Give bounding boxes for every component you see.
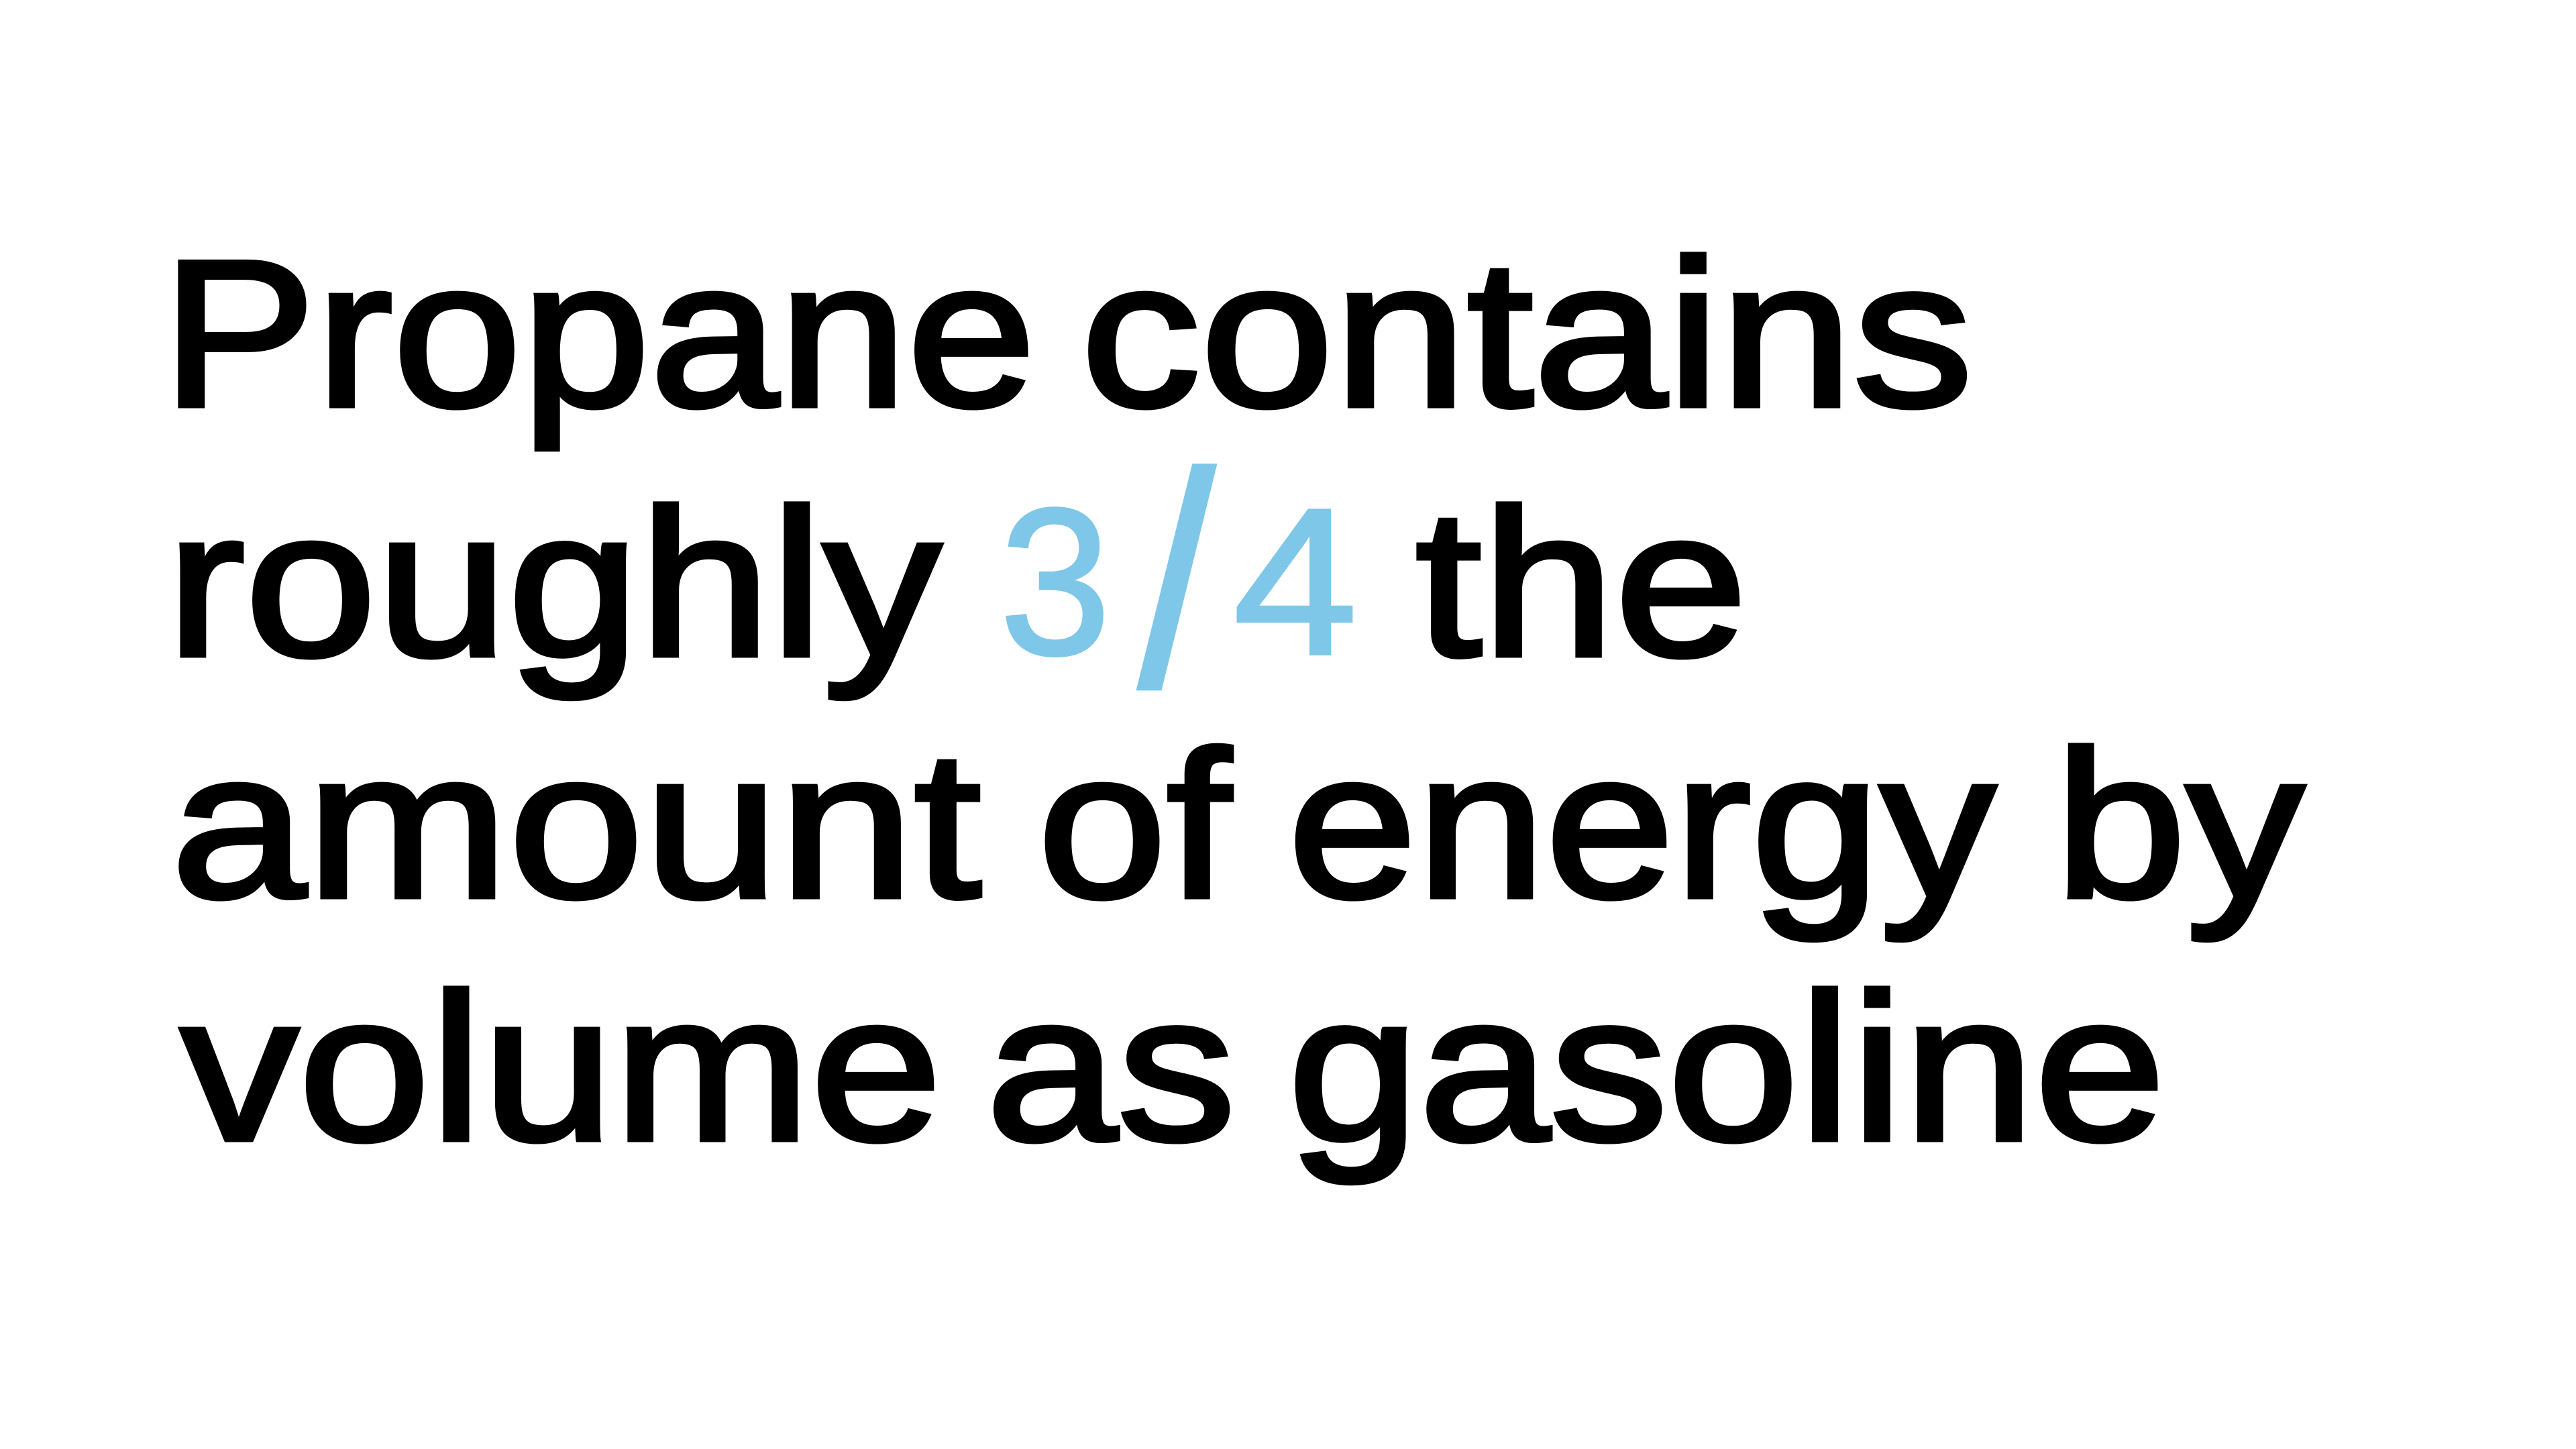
line 1: Propane contains: contains bbox=[1081, 217, 1973, 451]
line 1: Propane contains bbox=[162, 217, 1973, 451]
highlighted fraction 3/4: 4 bbox=[1233, 466, 1358, 699]
line 2: roughly 3/4 the: roughly bbox=[166, 467, 941, 701]
line 3: amount of energy by bbox=[171, 708, 2304, 943]
highlighted fraction 3/4 bbox=[1000, 411, 1358, 751]
line 4: volume as gasoline: as bbox=[986, 951, 1236, 1185]
line 3: amount of energy by: of bbox=[1038, 708, 1232, 942]
highlighted fraction 3/4: 3 bbox=[1000, 466, 1111, 699]
line 2: roughly 3/4 the: the bbox=[1415, 467, 1748, 700]
line 3: amount of energy by: amount bbox=[171, 708, 982, 942]
line 3: amount of energy by: energy bbox=[1288, 708, 1996, 943]
line 3: amount of energy by: by bbox=[2055, 708, 2304, 943]
highlighted fraction 3/4: / bbox=[1138, 411, 1216, 751]
line 4: volume as gasoline: gasoline bbox=[1288, 951, 2165, 1185]
line 2: roughly 3/4 the bbox=[166, 411, 1748, 751]
line 4: volume as gasoline bbox=[180, 951, 2165, 1185]
line 1: Propane contains: Propane bbox=[162, 217, 1036, 451]
line 4: volume as gasoline: volume bbox=[180, 951, 942, 1185]
